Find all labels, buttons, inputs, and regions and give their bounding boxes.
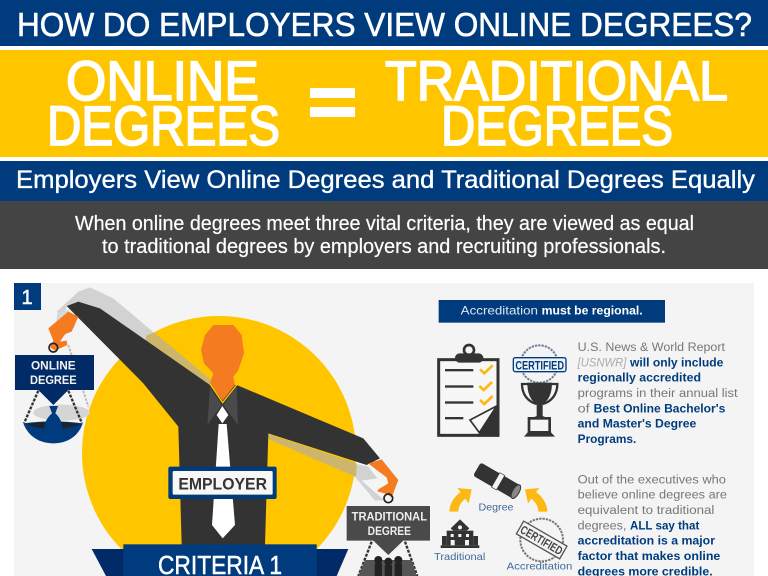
paragraph: executives: factor that makes online: [578, 549, 721, 563]
paragraph: executives: Out of the executives who: [578, 472, 726, 486]
panel: criteria 1 background: [14, 283, 754, 576]
paragraph: executives: believe online degrees are: [578, 488, 727, 502]
employer label: [168, 467, 277, 499]
accreditation heading bar: [439, 300, 665, 323]
online degree label: DEGREE: [30, 373, 77, 387]
paragraph: executives: ALL say that: [630, 518, 699, 532]
paragraph: USNWR: Best Online Bachelor's: [594, 401, 726, 415]
intro text band: to traditional degrees by employers and recruiting professionals.: [102, 236, 666, 258]
employer figure illustration: [15, 287, 430, 576]
paragraph: USNWR: will only include: [629, 355, 724, 369]
paragraph: USNWR: programs in their annual list: [578, 386, 738, 400]
right column content: [434, 300, 738, 576]
collar: [207, 387, 238, 425]
criteria ribbon: [92, 544, 348, 576]
intro text band: [0, 201, 768, 269]
number badge: 1: [21, 287, 33, 309]
right chains and scale: [358, 542, 417, 576]
paragraph: USNWR: U.S. News & World Report: [578, 340, 726, 354]
arrow: traditional to degree: [449, 488, 472, 512]
paragraph: USNWR: [577, 340, 738, 446]
traditional degree label: DEGREE: [368, 525, 411, 538]
paragraph: USNWR: regionally accredited: [578, 371, 701, 385]
paragraph: executives: equivalent to traditional: [578, 503, 714, 517]
yellow circle: [82, 316, 356, 576]
icon: diploma scroll: [473, 462, 523, 500]
yellow banner: online degrees equal traditional degrees: DEGREES: [441, 94, 673, 157]
tie: [212, 406, 235, 538]
arrow: accreditation to degree: [525, 488, 547, 512]
head: [201, 325, 244, 401]
icon: certified stamp: CERTIFIED: [518, 523, 565, 558]
paragraph: executives: [578, 472, 727, 576]
left hand: [48, 310, 78, 352]
icon: school building: [441, 519, 479, 548]
label: degree: Degree: [478, 503, 513, 514]
traditional degree label: [347, 506, 430, 555]
number badge: [14, 283, 41, 310]
subtitle band: Employers View Online Degrees and Traditional Degrees Equally: [16, 166, 755, 194]
paragraph: executives: accreditation is a major: [578, 534, 715, 548]
suit: [67, 302, 380, 545]
yellow banner: online degrees equal traditional degrees: [0, 49, 768, 157]
online degree label: ONLINE: [31, 358, 76, 372]
icon: certified trophy: [513, 345, 566, 437]
header band: title: HOW DO EMPLOYERS VIEW ONLINE DEGREES?: [17, 6, 752, 43]
accreditation heading bar: Accreditation: [461, 305, 538, 318]
online degree label: [15, 355, 94, 405]
yellow banner: online degrees equal traditional degrees: ONLINE: [66, 49, 259, 112]
paragraph: executives: degrees,: [578, 518, 626, 532]
label: traditional: Traditional: [434, 552, 485, 563]
arm shadow left on circle: [146, 332, 213, 385]
neck edge: [210, 384, 237, 403]
traditional degree label: TRADITIONAL: [352, 510, 427, 523]
icon: certified trophy: CERTIFIED: [515, 358, 564, 372]
right hand: [368, 459, 398, 503]
paragraph: USNWR: Programs.: [578, 432, 636, 446]
arm shadow left: [57, 287, 213, 385]
paragraph: USNWR: and Master's Degree: [578, 417, 697, 431]
left chains and scale: [23, 345, 90, 443]
yellow banner: online degrees equal traditional degrees: TRADITIONAL: [385, 49, 728, 112]
intro text band: When online degrees meet three vital criteria, they are viewed as equal: [75, 213, 694, 235]
icon: clipboard: [439, 345, 499, 437]
yellow banner: online degrees equal traditional degrees: DEGREES: [47, 94, 280, 157]
accreditation heading bar: must be regional.: [542, 305, 643, 318]
paragraph: USNWR: of: [578, 401, 590, 415]
icon: certified stamp: [509, 509, 574, 571]
subtitle band: [0, 161, 768, 201]
hand shadow right: [356, 464, 384, 501]
paragraph: USNWR: [USNWR]: [577, 355, 627, 369]
employer label: EMPLOYER: [178, 474, 267, 493]
label: accreditation: Accreditation: [507, 561, 572, 572]
arm shadow right: [267, 433, 357, 477]
